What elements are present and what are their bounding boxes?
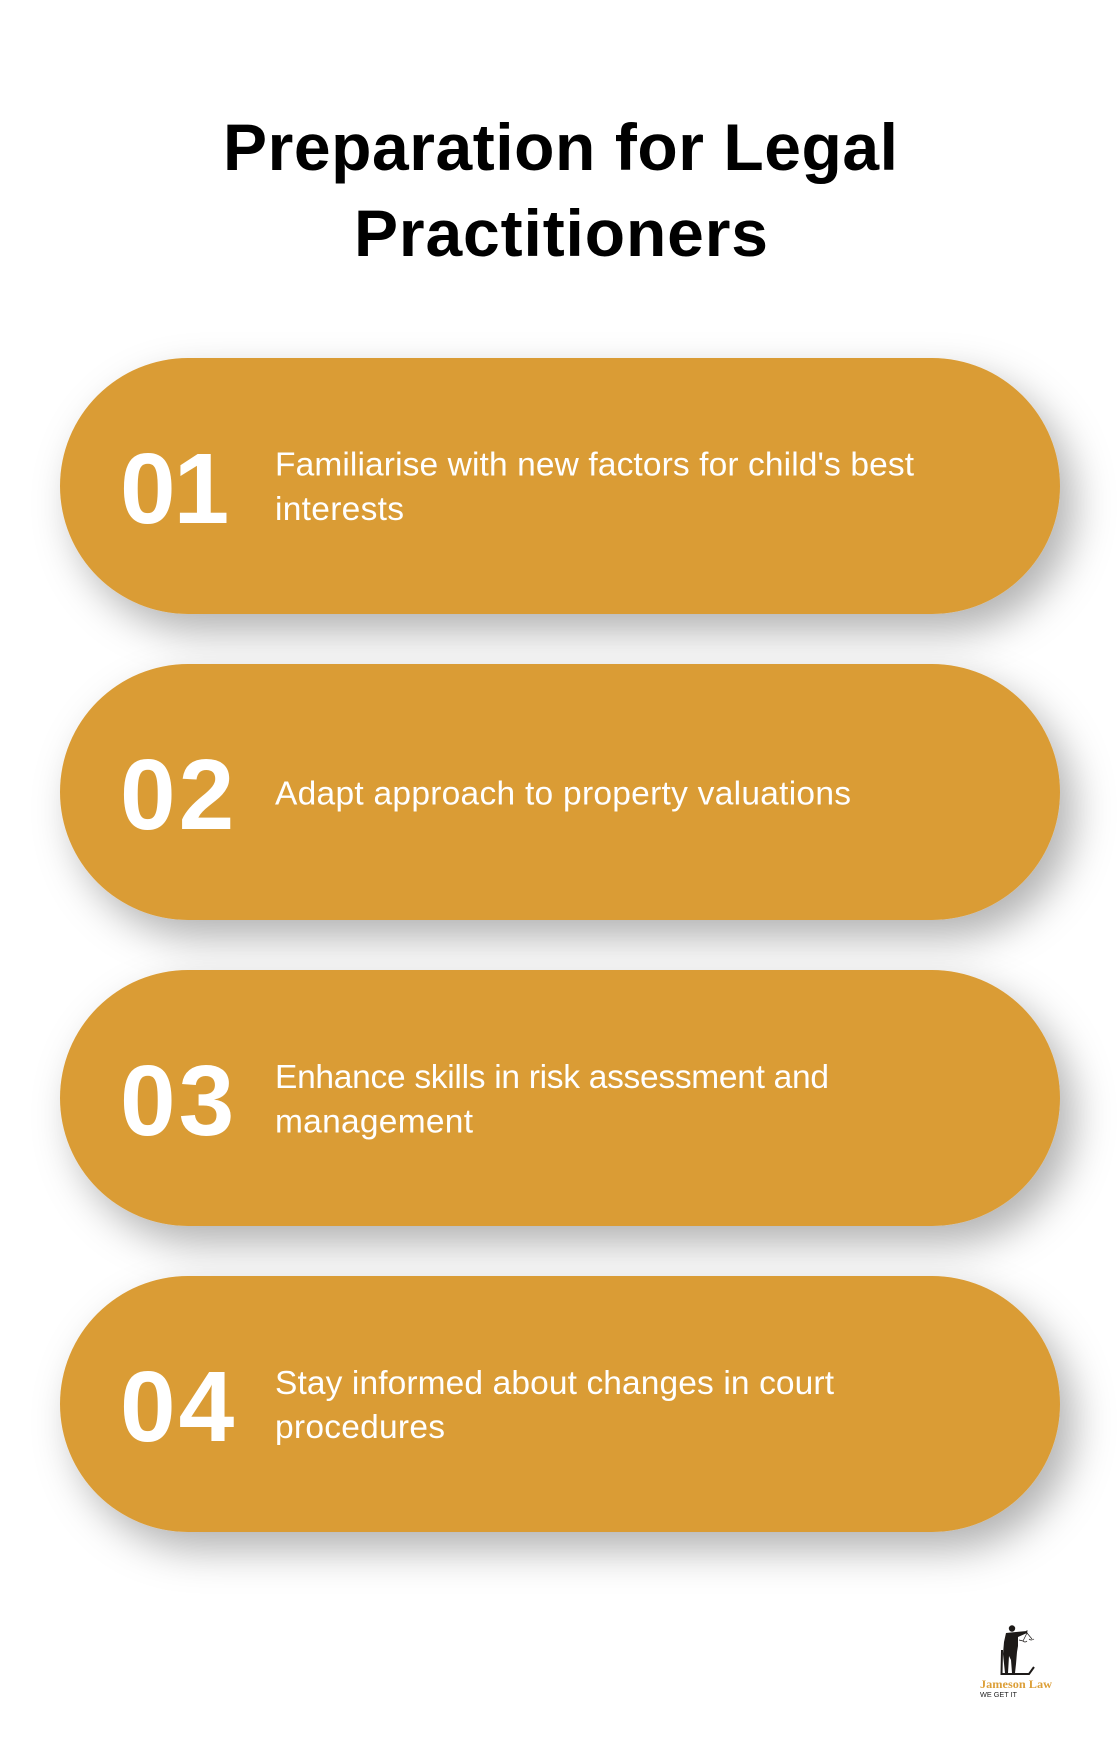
pill 03 background: [60, 970, 1060, 1226]
pill 01 background: [60, 358, 1060, 614]
logo tagline: WE GET IT: [980, 1692, 1018, 1699]
text: step 04: Stay informed about changes in court: [275, 1365, 835, 1402]
title: [223, 110, 898, 270]
pill 04 background: [60, 1276, 1060, 1532]
text: step 01: interests: [275, 491, 404, 528]
logo: Jameson Law: [980, 1625, 1053, 1699]
text: step 04: procedures: [275, 1409, 445, 1446]
number 04: 04: [120, 1351, 237, 1463]
title: Practitioners: [354, 196, 768, 270]
number 03: 03: [120, 1045, 237, 1157]
number 02: 02: [120, 739, 237, 851]
text: step 01: Familiarise with new factors for child's best: [275, 446, 915, 484]
pill 02 background: [60, 664, 1060, 920]
text: step 04: [275, 1365, 835, 1446]
text: step 03: Enhance skills in risk assessment and: [275, 1059, 829, 1096]
panel: step 02: [60, 664, 1060, 920]
number 01: 01: [120, 433, 227, 545]
icon: lady justice with L: [1002, 1625, 1034, 1674]
text: step 03: management: [275, 1104, 474, 1140]
logo name: Jameson Law: [980, 1679, 1053, 1691]
panel: step 04: [60, 1276, 1060, 1532]
panel: step 03: [60, 970, 1060, 1226]
text: step 01: [275, 446, 915, 528]
text: step 03: [275, 1059, 829, 1140]
text: step 02: Adapt approach to property valuations: [275, 776, 851, 812]
panel: step 01: [60, 358, 1060, 614]
title: Preparation for Legal: [223, 110, 898, 184]
